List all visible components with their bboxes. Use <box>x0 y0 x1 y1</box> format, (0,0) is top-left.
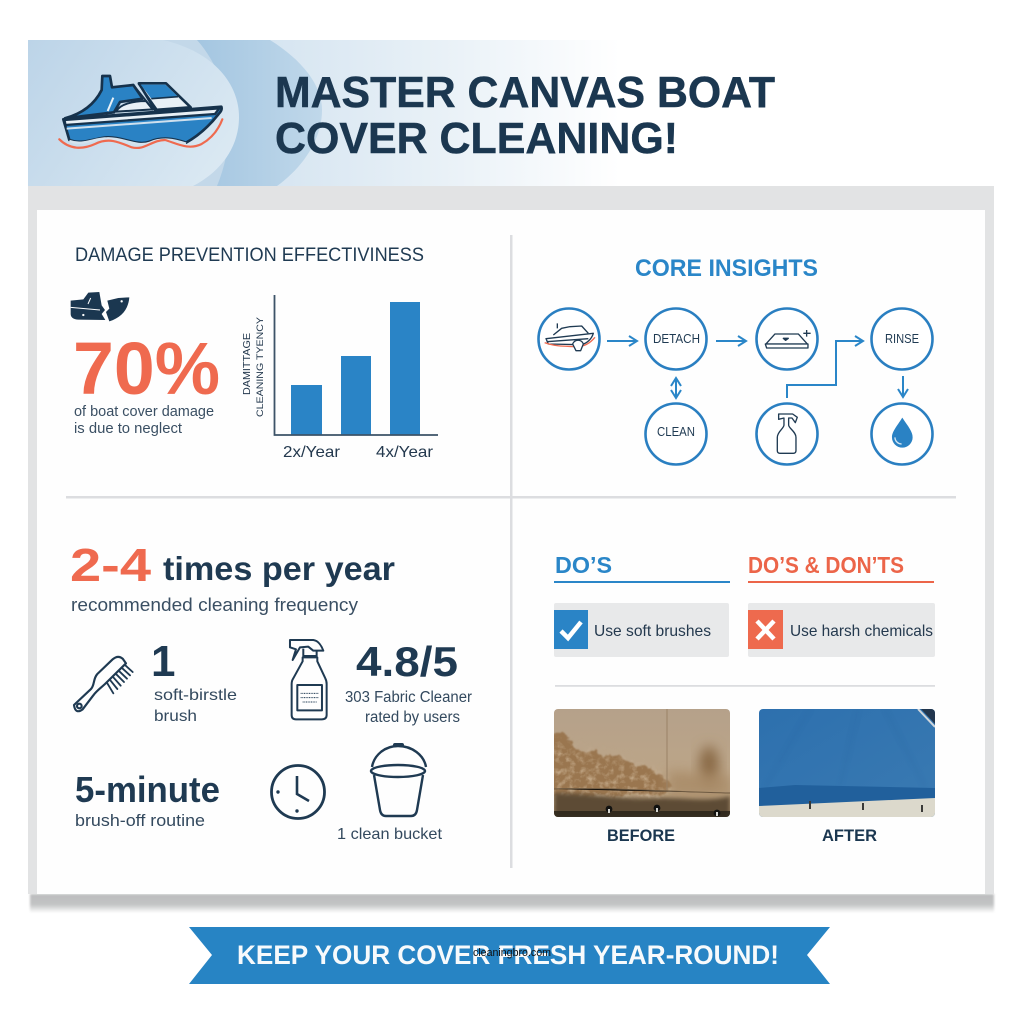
caption: soft-bristle brush: brush <box>154 708 197 725</box>
icon: folded cover <box>765 330 811 348</box>
header band <box>28 40 775 186</box>
stat: 5-minute: 5-minute <box>75 769 220 810</box>
process flow: RINSE <box>885 332 919 346</box>
title: MASTER CANVAS BOAT <box>275 68 775 117</box>
heading: damage prevention: DAMAGE PREVENTION EFFECTIVINESS <box>75 244 424 266</box>
process flow: CLEAN <box>657 425 695 439</box>
stat: 2-4 times per year: 2-4 <box>70 539 152 591</box>
icon: cleaner spray bottle <box>290 640 327 719</box>
caption: soft-bristle brush <box>154 687 237 725</box>
caption: recommended frequency: recommended cleaning frequency <box>71 595 358 615</box>
heading: core insights: CORE INSIGHTS <box>635 255 818 282</box>
process flow <box>538 308 932 464</box>
caption: damage cause: of boat cover damage <box>74 403 214 420</box>
stat: 70%: 70% <box>73 327 220 410</box>
label: after: AFTER <box>822 826 877 845</box>
title <box>275 68 775 163</box>
heading: do's and don'ts: DO’S & DON’TS <box>748 552 904 578</box>
icon: water drop <box>892 418 913 448</box>
bar chart: CLEANING TYENCY <box>255 316 266 417</box>
card frame <box>28 186 994 913</box>
icon: small boat <box>545 323 595 351</box>
do: soft brushes: Use soft brushes <box>594 623 711 640</box>
bar chart <box>242 295 438 461</box>
icon: brush <box>74 657 133 711</box>
don't: harsh chemicals: Use harsh chemicals <box>790 623 933 640</box>
heading: do's: DO’S <box>555 552 612 578</box>
icon: clock <box>272 766 324 818</box>
icon: torn cover <box>71 292 129 321</box>
stat: 2-4 times per year: times per year <box>163 550 395 587</box>
photo: before <box>540 709 730 817</box>
process flow: DETACH <box>653 332 700 346</box>
panel: cleaning frequency and tools <box>70 539 472 843</box>
caption: damage cause <box>74 403 214 437</box>
watermark: cleaningbro.com <box>473 947 551 959</box>
panel: damage prevention <box>71 244 438 461</box>
photo: after <box>759 709 935 817</box>
label: before: BEFORE <box>607 826 675 845</box>
caption: brush-off routine: brush-off routine <box>75 812 205 830</box>
banner <box>189 927 830 984</box>
title: COVER CLEANING! <box>275 114 678 163</box>
caption: clean bucket: 1 clean bucket <box>337 826 443 843</box>
icon: boat <box>59 76 222 148</box>
caption: fabric cleaner rating <box>345 689 472 726</box>
do: soft brushes <box>554 603 729 657</box>
banner: KEEP YOUR COVER FRESH YEAR-ROUND! <box>237 940 779 970</box>
caption: fabric cleaner rating: rated by users <box>365 709 460 726</box>
caption: damage cause: is due to neglect <box>74 420 183 437</box>
bar chart: DAMITTAGE <box>242 333 253 395</box>
stat: 1: 1 <box>151 637 175 686</box>
icon: bucket <box>371 743 426 816</box>
icon: spray bottle <box>777 414 797 453</box>
bar chart: 4x/Year <box>376 444 434 461</box>
bar chart: 2x/Year <box>283 444 341 461</box>
panel: do's and don'ts <box>540 552 935 845</box>
caption: fabric cleaner rating: 303 Fabric Cleaner <box>345 689 472 706</box>
stat: 4.8/5: 4.8/5 <box>356 638 458 685</box>
don't: harsh chemicals <box>748 603 935 657</box>
caption: soft-bristle brush: soft-birstle <box>154 687 237 704</box>
panel: core insights <box>538 255 932 464</box>
stat: 2-4 times per year <box>70 539 395 591</box>
